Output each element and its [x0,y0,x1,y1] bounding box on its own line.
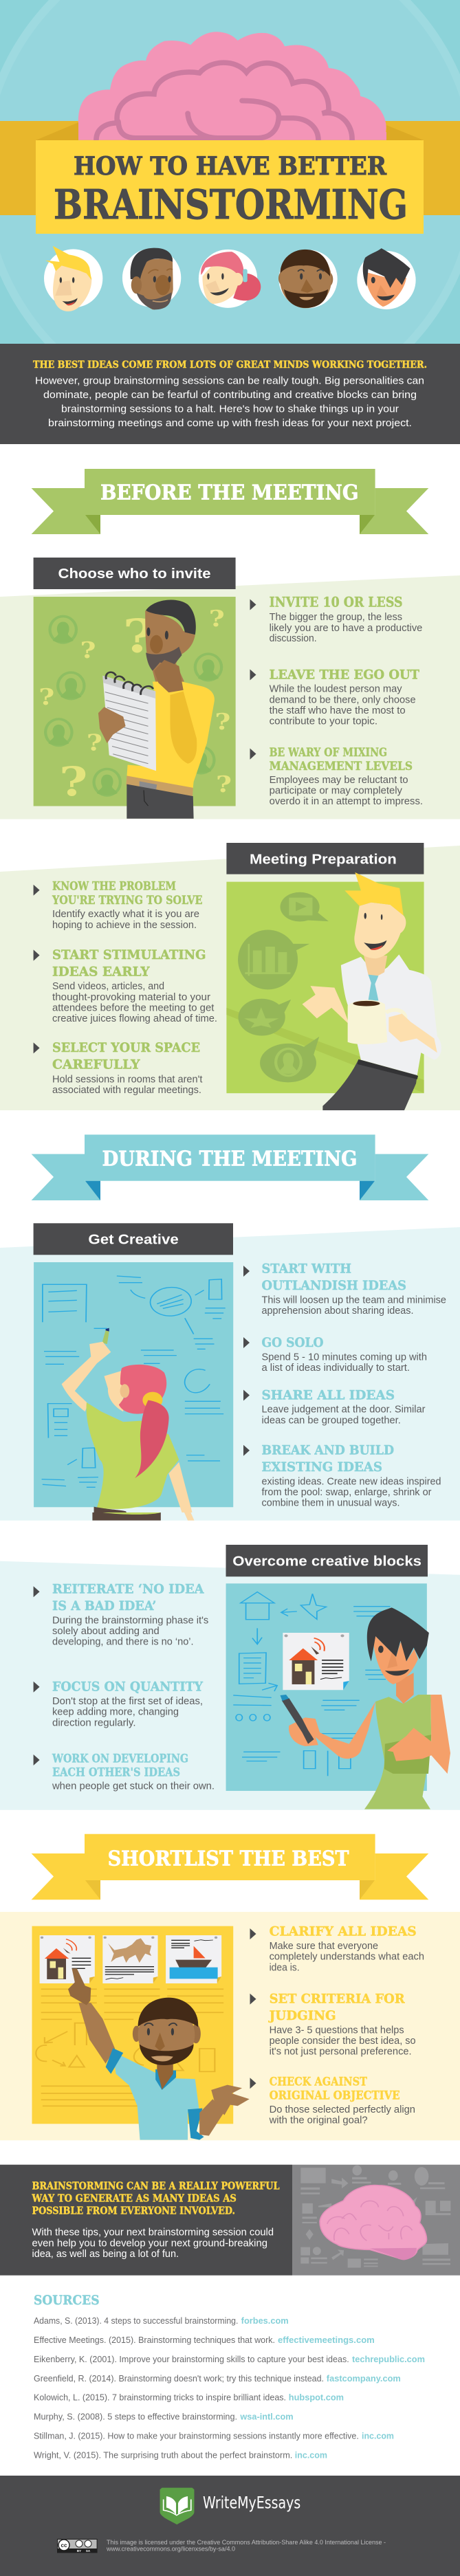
tip: focus on quantity: Don't stop at the first set of ideas, [52,1696,203,1707]
tips: overcome creative blocks [34,1581,215,1792]
source list: Effective Meetings. (2015). Brainstorming techniques that work. [34,2335,275,2345]
speech bubbles [238,892,329,1082]
closing paragraph: even help you to develop your next ground-breaking [32,2237,267,2249]
intro paragraph: brainstorming meetings and come up with fresh ideas for your next project. [48,417,412,429]
tip: reiterate no idea is a bad idea: developing, and there is no ‘no’. [52,1637,194,1648]
source list: Eikenberry, K. (2001). Improve your brainstorming skills to capture your best ideas. [34,2355,349,2364]
license text: This image is licensed under the Creative Commons Attribution-Share Alike 4.0 International License - [107,2539,386,2546]
tip: clarify all ideas: idea is. [270,1962,300,1973]
closing paragraph [32,2227,274,2260]
question marks: ? [122,608,155,663]
face: man with dark beard [278,250,333,308]
tip: start with outlandish ideas [243,1262,446,1317]
tips: get creative [243,1262,446,1509]
question marks: ? [87,730,102,756]
tip: be wary of mixing management levels: participate or may completely [270,786,403,797]
section background: get creative [0,1227,460,1521]
man figure [68,1968,250,2140]
tip: clarify all ideas: CLARIFY ALL IDEAS [270,1924,417,1939]
tip: invite 10 or less: likely you are to have a productive [270,623,422,634]
source list: inc.com [295,2451,327,2461]
tip: break and build existing ideas: BREAK AND BUILD [261,1442,394,1457]
man figure [303,872,441,1110]
closing headline: WAY TO GENERATE AS MANY IDEAS AS [32,2192,237,2204]
lower body of woman writing [92,1512,194,1521]
woman figure [62,1328,192,1512]
closing panel [0,2165,460,2276]
question marks: ? [39,684,54,710]
tip: reiterate no idea is a bad idea: solely about adding and [52,1626,160,1637]
intro panel [0,344,460,444]
panel heading: overcome creative blocks [226,1545,428,1576]
tip: break and build existing ideas: combine them in unusual ways. [261,1498,400,1509]
question marks: ? [215,709,230,735]
wall sketches [42,1276,226,1487]
tip: leave the ego out: contribute to your topic. [270,716,377,727]
section background: overcome creative blocks [0,1561,460,1810]
tip: know the problem [34,880,202,931]
source list: techrepublic.com [352,2355,425,2364]
tip: break and build existing ideas: existing ideas. Create new ideas inspired [261,1476,441,1487]
tips: meeting preparation [34,880,217,1096]
tip: set criteria for judging: SET CRITERIA FOR [270,1991,405,2006]
question marks: ? [209,606,225,632]
brain illustration [64,32,393,140]
face: woman with dark hair [363,248,410,307]
tip: invite 10 or less: The bigger the group, the less [270,612,402,623]
tip: check against original objective: CHECK AGAINST [270,2076,367,2089]
panel heading: get creative: Get Creative [88,1232,179,1247]
logo wordmark: WriteMyEssays [203,2494,300,2513]
tip: start stimulating ideas early: Send videos, articles, and [52,981,164,992]
tip: share all ideas [243,1387,426,1426]
panel heading: meeting preparation [226,843,424,874]
source list: Adams, S. (2013). 4 steps to successful brainstorming. [34,2316,238,2326]
question marks: ? [80,637,96,663]
tip: be wary of mixing management levels: MANAGEMENT LEVELS [270,760,413,773]
closing headline: POSSIBLE FROM EVERYONE INVOLVED. [32,2205,235,2216]
license text: www.creativecommons.org/licenxses/by-sa/4.0 [106,2546,235,2553]
tip: leave the ego out: the staff who have the most to [270,705,406,716]
creative commons badge: cc [61,2542,67,2549]
banner: before the meeting: BEFORE THE MEETING [100,481,359,505]
tip: share all ideas: SHARE ALL IDEAS [261,1387,395,1402]
tip: go solo: Spend 5 - 10 minutes coming up with [261,1352,427,1363]
creative commons badge: BY [77,2549,81,2553]
tip: reiterate no idea is a bad idea: IS A BAD IDEA’ [52,1598,156,1614]
tip: go solo [243,1335,427,1374]
illustration: man thinking with notepad [34,597,236,819]
source list: Stillman, J. (2015). How to make your brainstorming sessions instantly more effective. [34,2431,359,2441]
source list: forbes.com [241,2316,289,2326]
source list: hubspot.com [289,2393,344,2403]
creative commons badge: SA [86,2549,91,2553]
tip: focus on quantity: FOCUS ON QUANTITY [52,1679,203,1694]
wall sketches [233,1592,391,1776]
tip: be wary of mixing management levels: overdo it in an attempt to impress. [270,796,423,807]
tip: be wary of mixing management levels: Employees may be reluctant to [270,775,408,786]
intro paragraph: However, group brainstorming sessions can be really tough. Big personalities can [35,375,424,386]
tip: clarify all ideas: Make sure that everyone [270,1941,378,1952]
banner: shortlist the best [32,1834,428,1900]
tip: select your space carefully: CAREFULLY [52,1057,140,1072]
tip: check against original objective: with the original goal? [269,2115,368,2126]
footer [0,2476,460,2576]
tip: invite 10 or less: INVITE 10 OR LESS [270,594,403,610]
source list [34,2316,425,2461]
woman figure [280,1607,450,1809]
brain with idea sketches [300,2166,450,2268]
face: blond man [45,246,91,311]
section background: choose who to invite [0,575,460,819]
character faces row [44,246,416,311]
sources [34,2293,425,2461]
logo: book shield [160,2488,194,2524]
tip: focus on quantity [34,1679,203,1728]
tip: leave the ego out: demand to be there, only choose [270,694,416,705]
tip: reiterate no idea is a bad idea: REITERATE ‘NO IDEA [52,1581,204,1596]
panel heading: meeting preparation: Meeting Preparation [250,852,397,867]
closing paragraph: With these tips, your next brainstorming session could [32,2227,274,2238]
question marks: ? [216,772,232,797]
intro headline: THE BEST IDEAS COME FROM LOTS OF GREAT MINDS WORKING TOGETHER. [33,360,427,371]
tip: be wary of mixing management levels: BE WARY OF MIXING [270,746,387,760]
tip: work on developing each other's ideas: when people get stuck on their own. [52,1781,215,1792]
license text [106,2539,386,2553]
question marks: ? [59,758,87,805]
tip: set criteria for judging: Have 3- 5 questions that helps [270,2025,404,2036]
panel heading: choose who to invite: Choose who to invite [58,566,210,582]
posters [40,1935,221,1983]
illustration: woman presenting ideas with marker [226,1583,450,1809]
face: man with grey beard [131,248,173,309]
tip: leave the ego out [250,668,419,727]
tip: reiterate no idea is a bad idea: During the brainstorming phase it's [52,1615,208,1626]
tip: break and build existing ideas: EXISTING IDEAS [261,1460,382,1475]
banner: during the meeting: DURING THE MEETING [102,1147,358,1171]
creative commons badge [57,2539,98,2553]
title line 1: HOW TO HAVE BETTER [74,152,387,181]
tip: select your space carefully [34,1040,202,1096]
shadow folds at box corners [36,122,78,140]
title box [36,140,424,234]
sources heading: SOURCES [34,2293,100,2308]
tip: set criteria for judging: people consider the best idea, so [270,2036,416,2047]
tip: set criteria for judging [250,1991,416,2057]
tip: know the problem: KNOW THE PROBLEM [52,880,176,894]
tip: select your space carefully: associated with regular meetings. [52,1085,201,1096]
tip: be wary of mixing management levels [250,746,423,807]
section background: shortlist [0,1912,460,2140]
banner: during the meeting [32,1134,428,1200]
tips: shortlist [250,1924,424,2126]
tip: select your space carefully: Hold sessions in rooms that aren't [52,1074,202,1085]
source list: Wright, V. (2015). The surprising truth about the perfect brainstorm. [34,2451,292,2461]
tip: select your space carefully: SELECT YOUR SPACE [52,1040,200,1055]
tip: set criteria for judging: JUDGING [268,2008,336,2023]
header panel [0,0,460,425]
tip: know the problem: YOU'RE TRYING TO SOLVE [52,894,202,907]
man figure [98,599,215,819]
illustration: man with coffee and idea bubbles [226,872,441,1110]
tip: check against original objective [250,2076,415,2126]
closing paragraph: idea, as well as being a lot of fun. [32,2248,179,2260]
question marks [39,606,232,805]
tip: start stimulating ideas early: attendees before the meeting to get [52,1002,214,1013]
source list: wsa-intl.com [239,2412,294,2421]
tip: know the problem: hoping to achieve in the session. [52,920,197,931]
tip: invite 10 or less: discussion. [270,633,317,644]
tip: focus on quantity: keep adding more, changing [52,1707,179,1718]
source list: Kolowich, L. (2015). 7 brainstorming tricks to inspire brilliant ideas. [34,2393,286,2403]
panel heading: choose who to invite [34,558,236,589]
poster [283,1633,349,1690]
panel heading: get creative [34,1223,233,1255]
intro paragraph: brainstorming sessions to a halt. Here's how to shake things up in your [61,403,399,415]
tip: reiterate no idea is a bad idea [34,1581,208,1648]
closing headline [32,2181,279,2216]
tip: clarify all ideas [250,1924,424,1973]
closing headline: BRAINSTORMING CAN BE A REALLY POWERFUL [32,2181,279,2192]
tip: start with outlandish ideas: OUTLANDISH IDEAS [261,1278,406,1293]
source list: Greenfield, R. (2014). Brainstorming doesn't work; try this technique instead. [34,2374,324,2384]
tip: set criteria for judging: it's not just personal preference. [270,2046,412,2057]
face: woman with red hair [201,252,261,304]
tip: check against original objective: ORIGINAL OBJECTIVE [270,2089,400,2102]
illustration: woman writing on a wall [34,1262,233,1512]
intro paragraph [35,375,424,429]
tips: choose who to invite [250,594,423,807]
tip: check against original objective: Do those selected perfectly align [270,2104,415,2115]
tip: go solo: GO SOLO [261,1335,323,1350]
tip: leave the ego out: LEAVE THE EGO OUT [270,668,419,683]
source list: fastcompany.com [327,2374,401,2384]
illustration: man pointing at idea posters [32,1926,250,2140]
tip: share all ideas: ideas can be grouped together. [261,1415,401,1426]
tip: start with outlandish ideas: START WITH [261,1262,351,1277]
tip: work on developing each other's ideas: WORK ON DEVELOPING [52,1752,188,1765]
tip: know the problem: Identify exactly what it is you are [52,909,199,920]
tip: invite 10 or less [250,594,422,644]
tip: leave the ego out: While the loudest person may [270,683,402,694]
tip: start with outlandish ideas: This will loosen up the team and minimise [261,1295,446,1306]
tip: work on developing each other's ideas [34,1752,215,1792]
tip: clarify all ideas: completely understands what each [270,1952,424,1963]
tip: start stimulating ideas early: START STIMULATING [52,947,206,962]
tip: go solo: a list of ideas individually to start. [261,1363,410,1374]
banner: before the meeting [32,469,428,534]
tip: focus on quantity: direction regularly. [52,1717,136,1728]
section background: meeting preparation [0,846,460,1110]
tip: start stimulating ideas early: IDEAS EARLY [52,965,150,980]
tip: start with outlandish ideas: apprehension about sharing ideas. [261,1306,414,1317]
tip: start stimulating ideas early [34,947,217,1024]
tip: share all ideas: Leave judgement at the door. Similar [261,1405,426,1416]
source list: inc.com [362,2431,394,2441]
panel heading: overcome creative blocks: Overcome creative blocks [232,1554,421,1569]
intro paragraph: dominate, people can be fearful of contributing and creative blocks can bring [43,389,417,401]
source list: Murphy, S. (2008). 5 steps to effective brainstorming. [34,2412,237,2421]
tip: break and build existing ideas: from the pool: swap, enlarge, shrink or [261,1487,432,1498]
tip: start stimulating ideas early: creative juices flowing ahead of time. [52,1013,217,1024]
gold band behind title [0,121,460,215]
tip: work on developing each other's ideas: EACH OTHER'S IDEAS [52,1765,180,1779]
tip: start stimulating ideas early: thought-provoking material to your [52,992,210,1003]
source list: effectivemeetings.com [278,2335,375,2345]
wall scribbles [36,1989,223,2106]
banner: shortlist the best: SHORTLIST THE BEST [108,1847,349,1871]
tip: break and build existing ideas [243,1442,441,1509]
